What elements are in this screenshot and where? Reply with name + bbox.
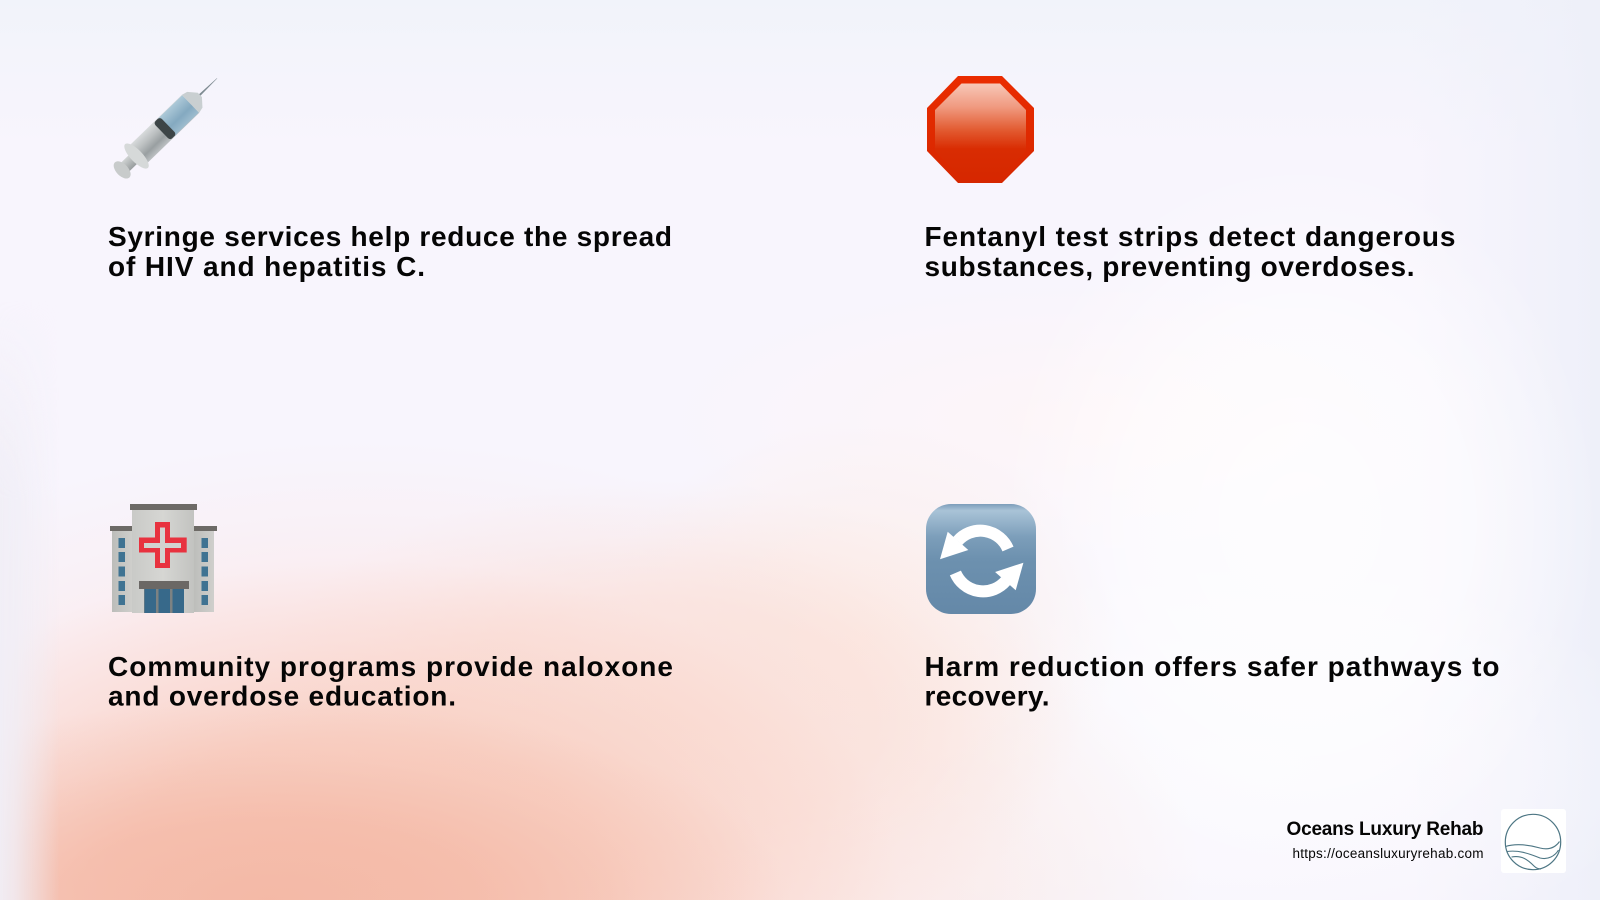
panel: harm reduction pathways: [924, 504, 1508, 712]
text: syringe services: Syringe services help reduce the spread: [108, 221, 672, 252]
brand url: https://oceansluxuryrehab.com: [1292, 846, 1484, 861]
text: fentanyl test strips: Fentanyl test strips detect dangerous: [924, 221, 1456, 252]
icon: syringe: [106, 66, 229, 186]
icon: hospital: [110, 504, 217, 613]
panel: fentanyl test strips: [924, 76, 1464, 282]
brand footer: [1286, 809, 1566, 873]
icon: stop sign: [927, 76, 1034, 183]
brand name: Oceans Luxury Rehab: [1286, 819, 1484, 840]
panel: syringe services: [106, 66, 680, 282]
text: community programs: Community programs provide naloxone: [108, 651, 673, 682]
text: harm reduction pathways: Harm reduction offers safer pathways to: [924, 651, 1500, 682]
logo: [1501, 809, 1566, 873]
text: community programs: and overdose education.: [108, 680, 456, 712]
text: harm reduction pathways: recovery.: [924, 680, 1050, 712]
panel: community programs: [108, 504, 682, 712]
text: fentanyl test strips: substances, preventing overdoses.: [924, 251, 1414, 282]
icon: refresh arrows: [926, 504, 1036, 614]
text: syringe services: of HIV and hepatitis C.: [108, 251, 425, 282]
